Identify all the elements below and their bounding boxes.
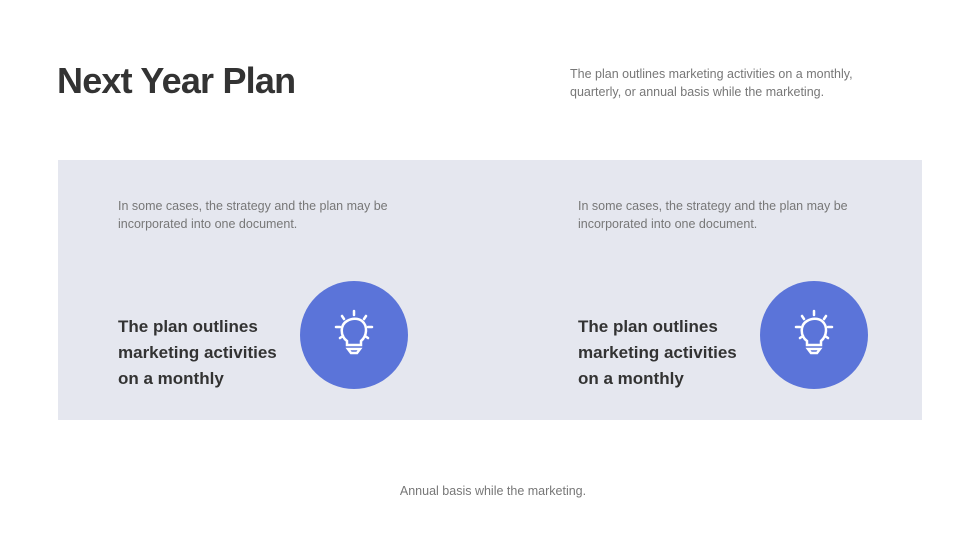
right description: In some cases, the strategy and the plan may be incorporated into one document. <box>578 199 848 231</box>
title: Next Year Plan <box>57 60 295 101</box>
right heading: The plan outlines marketing activities on a monthly <box>578 317 737 388</box>
panel: main <box>58 160 922 420</box>
left heading: The plan outlines marketing activities on a monthly <box>118 317 277 388</box>
footer text: Annual basis while the marketing. <box>400 484 586 498</box>
icon: right lightbulb <box>760 281 868 389</box>
intro text: The plan outlines marketing activities on a monthly, quarterly, or annual basis while the marketing. <box>570 67 853 99</box>
left description: In some cases, the strategy and the plan may be incorporated into one document. <box>118 199 388 231</box>
icon: left lightbulb <box>300 281 408 389</box>
